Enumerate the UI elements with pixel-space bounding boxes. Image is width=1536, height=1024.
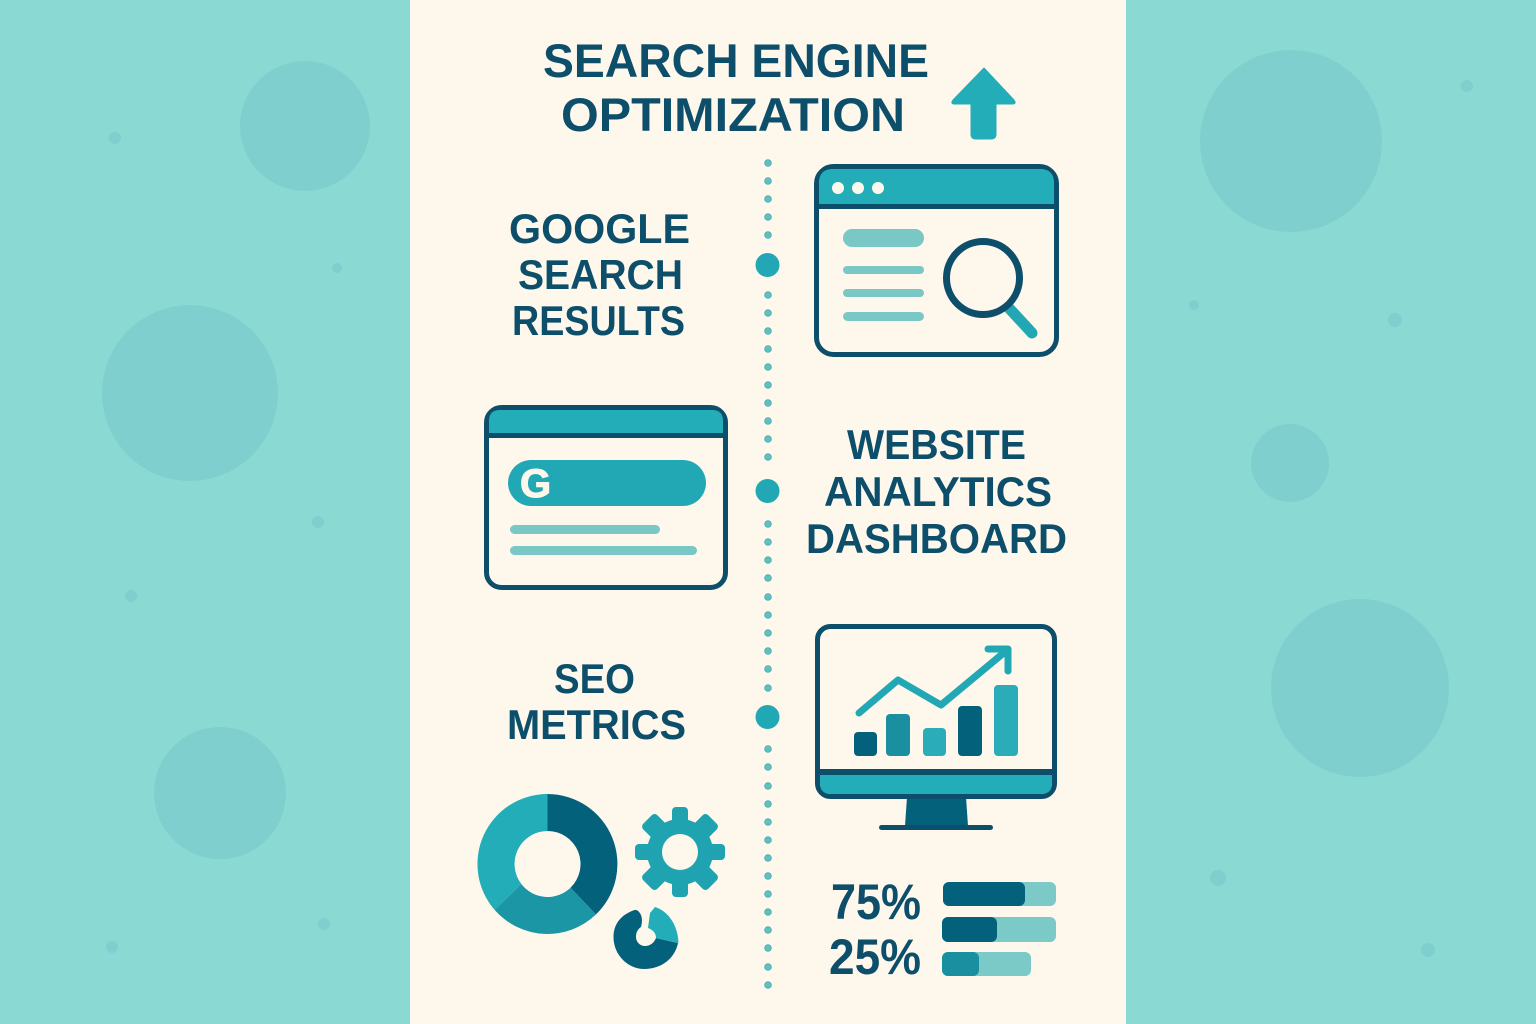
dotted timeline xyxy=(756,160,780,988)
timeline node 3 xyxy=(756,705,780,729)
browser header bar xyxy=(819,169,1054,205)
trend arrow xyxy=(859,649,1008,713)
heading: website analytics dashboard xyxy=(806,421,1067,562)
monitor base xyxy=(879,825,993,830)
donut segment: light xyxy=(477,794,548,910)
icon: gear xyxy=(635,807,725,897)
title xyxy=(543,34,929,141)
left background blobs xyxy=(102,61,370,953)
window dots xyxy=(832,182,884,194)
text lines xyxy=(510,525,697,555)
icon: browser window with magnifier xyxy=(816,166,1057,354)
title: OPTIMIZATION xyxy=(561,88,905,141)
progress bar 1 xyxy=(943,882,1056,906)
monitor body xyxy=(818,626,1054,796)
small pie teal segment xyxy=(648,907,678,943)
percentages xyxy=(829,874,921,985)
header divider xyxy=(816,204,1057,209)
progress bars xyxy=(942,882,1056,976)
monitor stand xyxy=(905,797,968,826)
monitor chin xyxy=(820,773,1052,794)
progress bar 2 xyxy=(942,917,1056,942)
heading: seo metrics xyxy=(507,655,686,748)
timeline node 2 xyxy=(756,479,780,503)
percentages: 75% xyxy=(831,874,921,930)
donut segment: dark xyxy=(548,794,617,914)
heading: google search results: SEARCH xyxy=(518,251,683,298)
search pill xyxy=(508,460,706,506)
progress bar 3 xyxy=(942,952,1031,976)
right background blobs xyxy=(1189,50,1473,957)
small pie chart xyxy=(614,907,678,969)
donut chart xyxy=(477,794,617,934)
header divider xyxy=(486,433,726,438)
bar chart xyxy=(854,685,1018,756)
gear hole xyxy=(662,834,698,870)
heading: google search results xyxy=(509,205,690,344)
title: SEARCH ENGINE xyxy=(543,34,929,87)
heading: website analytics dashboard: WEBSITE xyxy=(847,421,1026,468)
heading: google search results: GOOGLE xyxy=(509,205,690,252)
timeline dots xyxy=(765,160,771,988)
central cream panel xyxy=(410,0,1126,1024)
donut segment: mid xyxy=(495,884,596,934)
browser body xyxy=(816,166,1056,354)
chin divider xyxy=(816,769,1056,775)
small pie dark segment xyxy=(614,910,678,969)
icon: up arrow xyxy=(952,68,1015,139)
browser body xyxy=(486,408,726,588)
magnifier lens xyxy=(946,242,1020,314)
browser header bar xyxy=(489,410,723,434)
heading: seo metrics: SEO xyxy=(554,655,635,702)
heading: seo metrics: METRICS xyxy=(507,701,686,748)
heading: website analytics dashboard: ANALYTICS xyxy=(824,468,1052,515)
icon: monitor with growth chart xyxy=(816,626,1056,830)
percentages: 25% xyxy=(829,929,921,985)
timeline node 1 xyxy=(756,253,780,277)
icon: google search browser xyxy=(486,408,726,588)
result lines xyxy=(843,229,924,321)
heading: google search results: RESULTS xyxy=(512,297,685,344)
google g: G xyxy=(520,462,551,506)
magnifier handle xyxy=(1008,307,1032,333)
heading: website analytics dashboard: DASHBOARD xyxy=(806,515,1067,562)
